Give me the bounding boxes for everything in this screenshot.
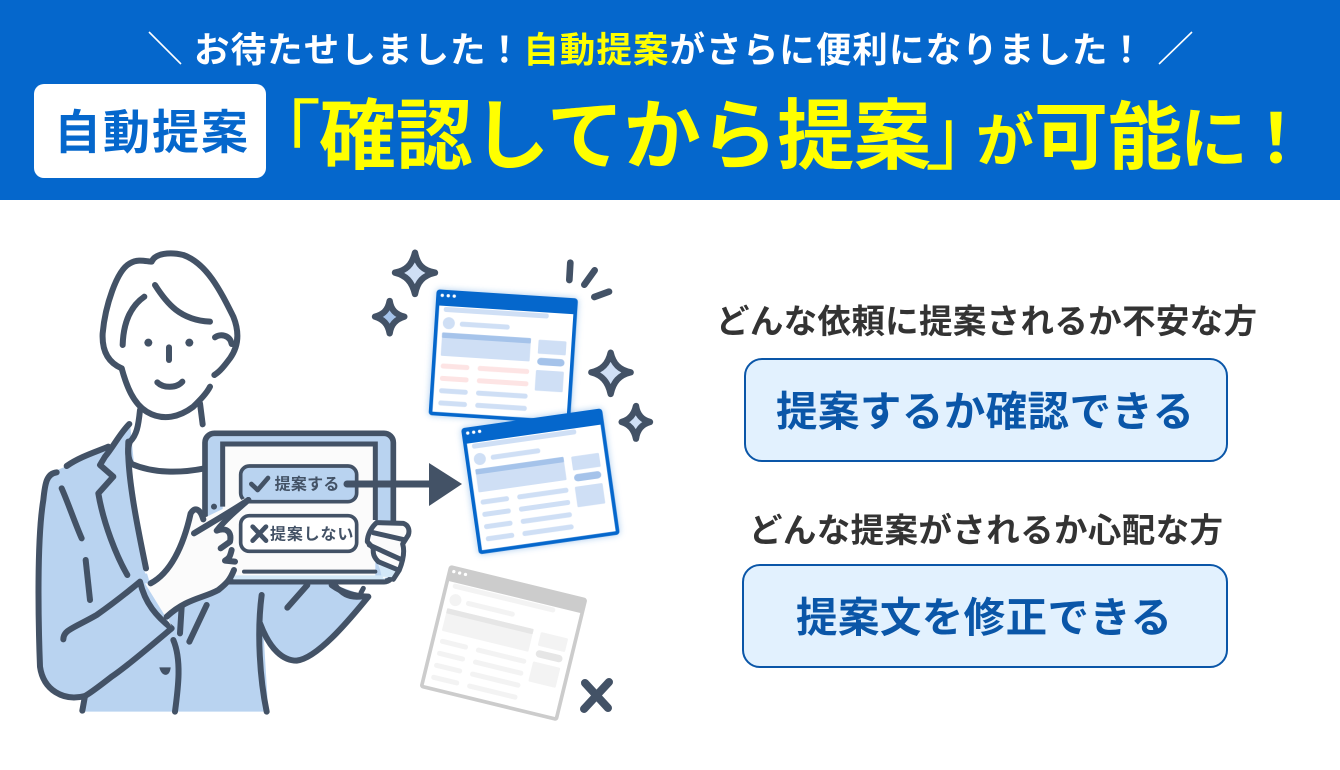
sparkle 4 — [622, 406, 650, 439]
eyes — [144, 339, 193, 347]
question text 1: どんな依頼に提案されるか不安な方 — [716, 304, 1257, 341]
main title: に — [1180, 102, 1248, 178]
badge: auto proposal: 自動提案 — [54, 106, 248, 159]
holding hand — [337, 523, 409, 597]
sparkle 2 — [375, 301, 404, 333]
action card 1: 提案するか確認できる — [776, 388, 1194, 435]
main title — [245, 94, 1310, 180]
action card 1 — [745, 359, 1227, 461]
jacket lines — [39, 424, 368, 712]
sparkle 1 — [395, 253, 435, 294]
main title: ！ — [1242, 102, 1310, 178]
head outline and hair — [103, 253, 237, 472]
decorative slash right — [1159, 32, 1192, 64]
main title: 可能 — [1034, 96, 1182, 179]
shirt — [131, 465, 207, 583]
decorative slash left — [149, 32, 181, 64]
jacket fill — [38, 423, 368, 712]
header banner — [0, 0, 1340, 200]
sparkles and accents — [375, 253, 650, 554]
button: propose: 提案する — [275, 475, 339, 493]
window: top blue — [429, 289, 578, 424]
sparkle 3 — [591, 353, 631, 394]
button: propose — [241, 466, 357, 502]
button: do not propose — [241, 516, 357, 551]
attention lines — [569, 263, 609, 297]
action card 2: 提案文を修正できる — [796, 594, 1172, 641]
main title: 確認してから提案 — [319, 94, 931, 180]
arrow from tablet button to window — [347, 463, 462, 506]
subheading: お待たせしました！自動提案がさらに便利になりました！ — [194, 30, 1144, 70]
action card 2 — [743, 565, 1227, 667]
question text 2: どんな提案がされるか心配な方 — [749, 512, 1223, 550]
illustration: person holding tablet — [38, 253, 409, 712]
icon: x mark — [584, 682, 609, 709]
window: rejected grey — [419, 565, 588, 721]
window: front blue — [461, 408, 620, 554]
main title: が — [976, 109, 1034, 174]
main title: 」 — [925, 95, 1001, 180]
pocket — [159, 667, 171, 675]
pointing hand — [145, 497, 250, 627]
main title: 「 — [245, 95, 321, 180]
tablet — [205, 433, 393, 582]
badge: auto proposal — [34, 84, 266, 178]
button: do not propose: 提案しない — [270, 525, 353, 543]
